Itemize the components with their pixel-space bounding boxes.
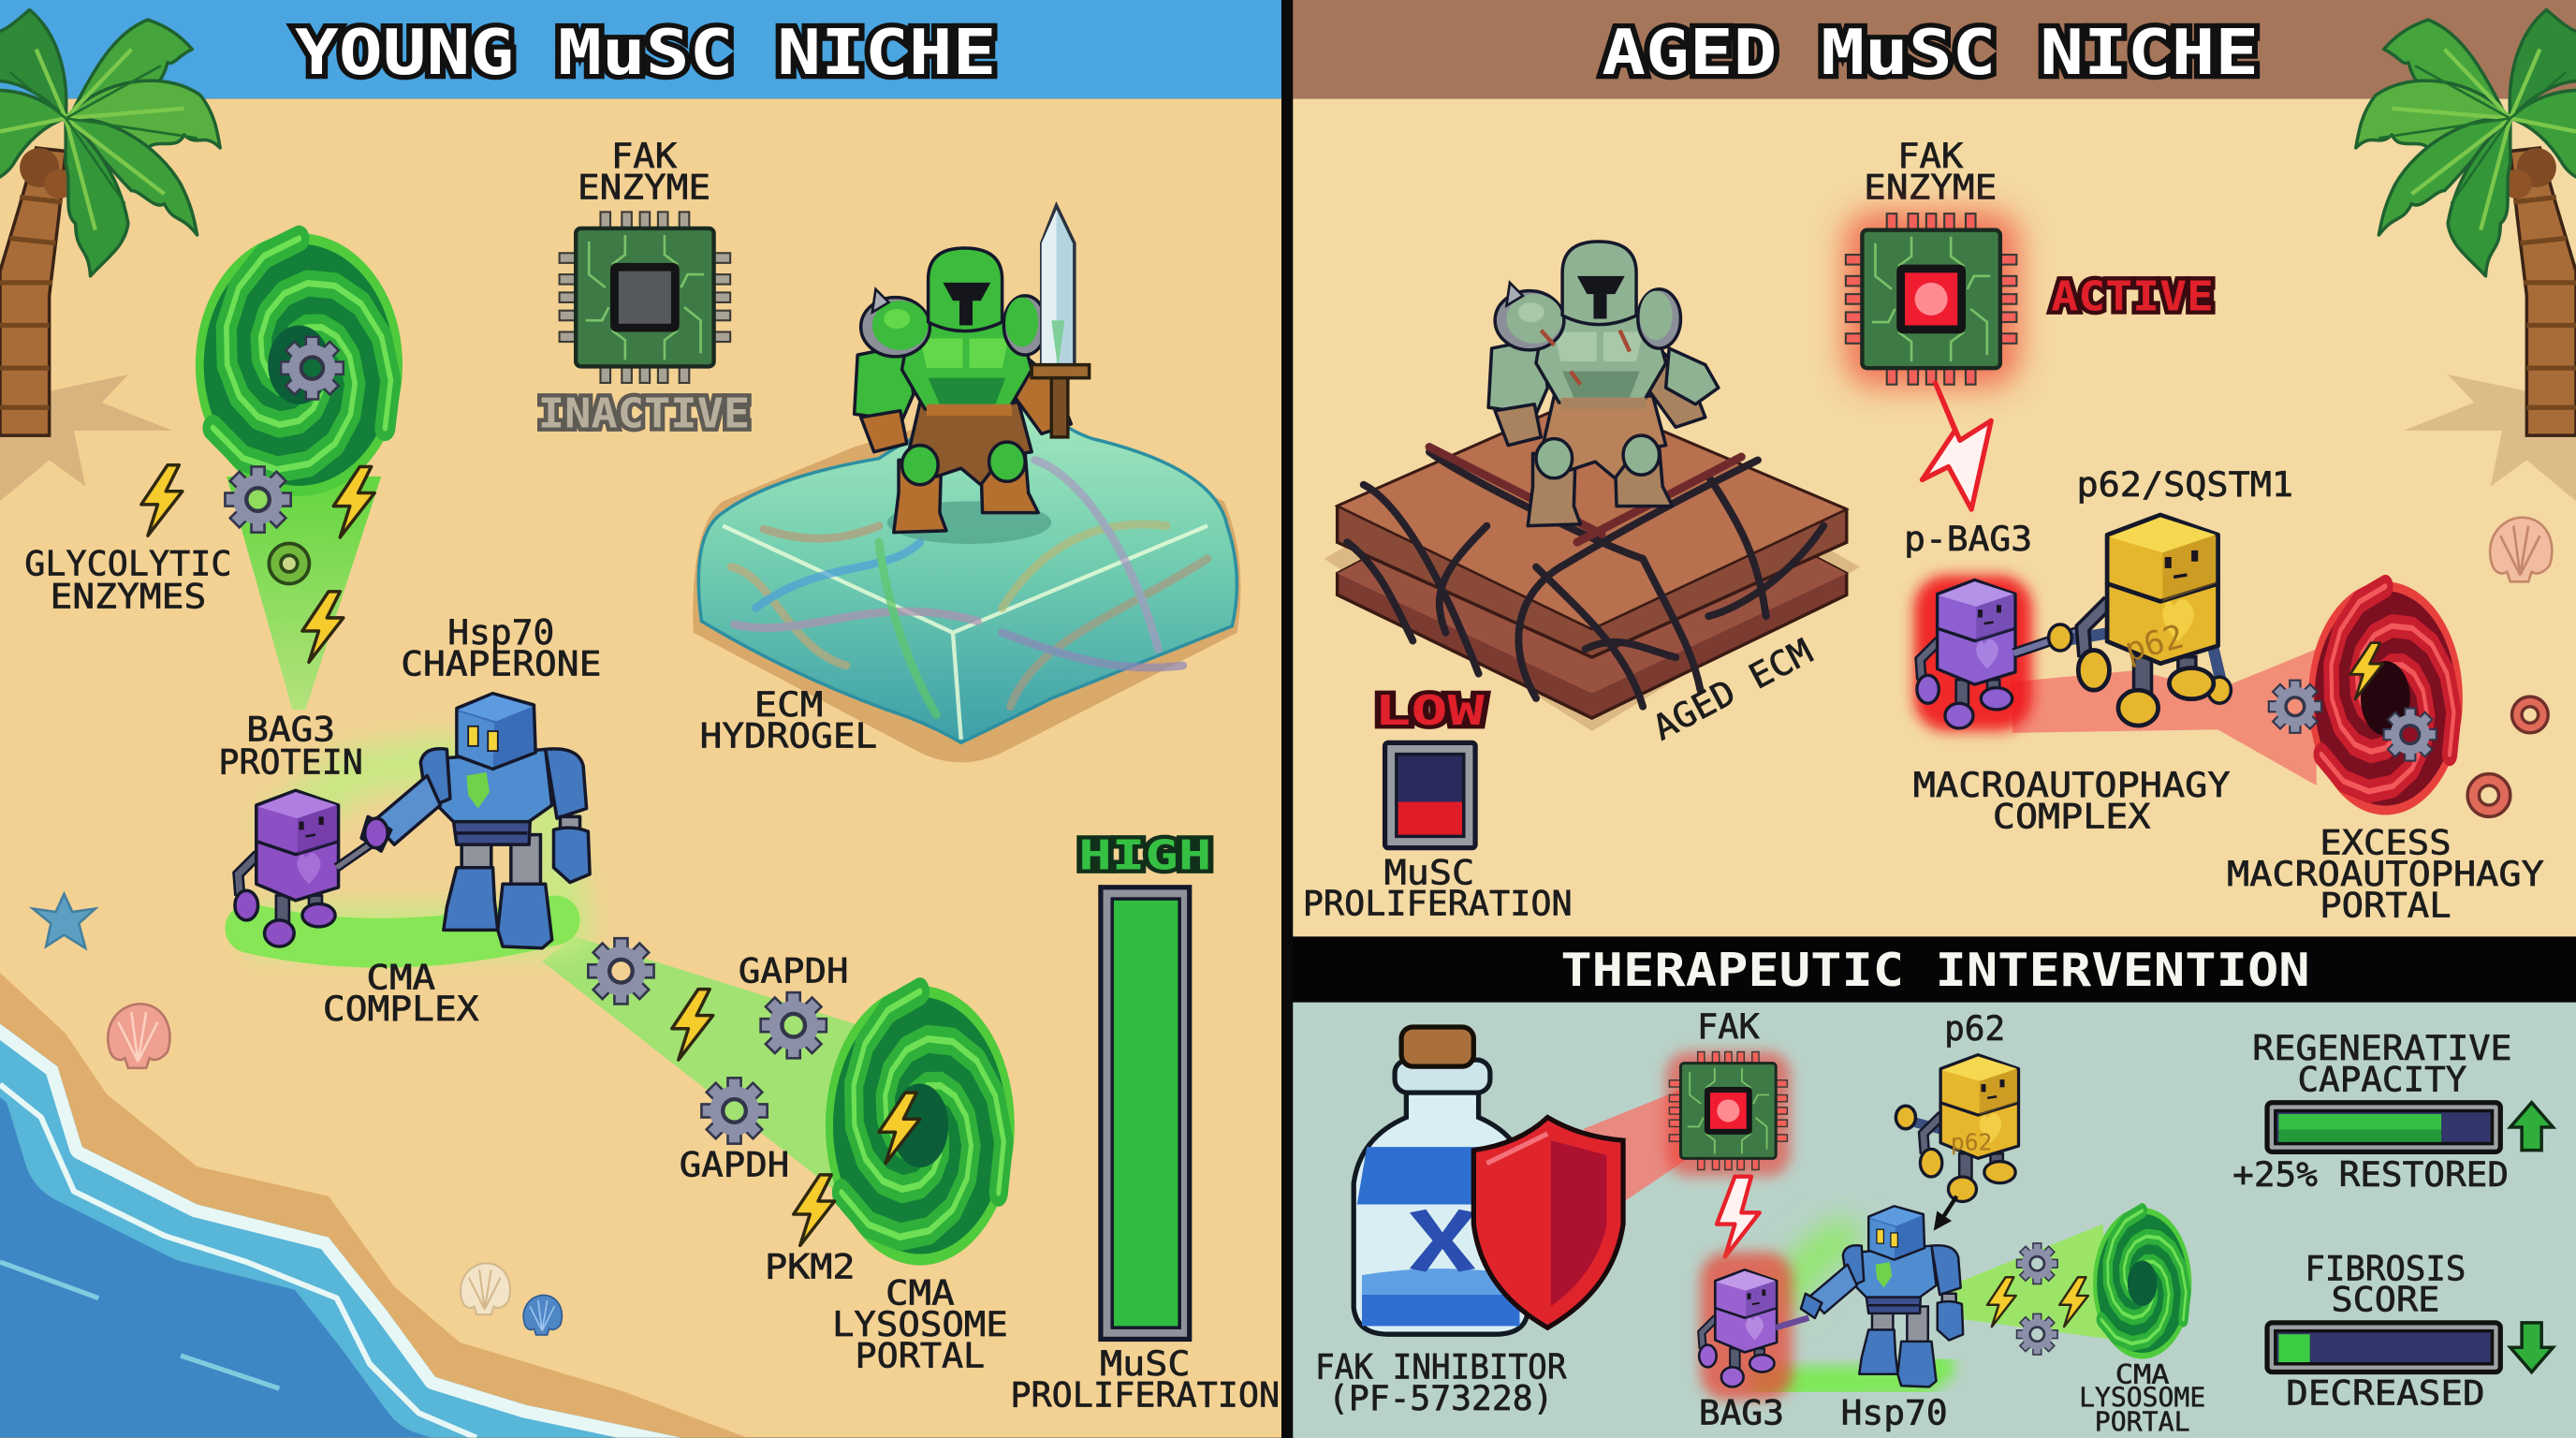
palm shadow — [0, 374, 172, 501]
lightning: blocked — [1717, 1177, 1760, 1257]
label: Hsp70: CHAPERONE — [401, 643, 601, 683]
gear — [2017, 1313, 2057, 1355]
green upper glow — [1782, 1232, 1856, 1306]
label: FAK enzyme: ENZYME — [578, 167, 710, 207]
bolt — [333, 466, 374, 537]
label: GAPDH — [680, 1145, 789, 1185]
label: restored: +25% RESTORED — [2232, 1154, 2509, 1195]
label: MuSC proliferation: PROLIFERATION — [1010, 1374, 1280, 1415]
gauge: fibrosis — [2267, 1323, 2500, 1372]
glycolytic portal — [196, 233, 421, 507]
chip glow — [1666, 1051, 1791, 1177]
gear GAPDH — [761, 992, 827, 1058]
glycolysis tail beam — [227, 477, 381, 710]
icon: FAK chip — [1669, 1052, 1787, 1169]
red glow behind p-BAG3 — [1914, 575, 2032, 731]
aged ECM slabs — [1338, 398, 1847, 718]
starfish — [33, 894, 95, 948]
label: fibrosis score: FIBROSIS — [2305, 1248, 2466, 1288]
panel: aged MuSC niche — [1293, 0, 2576, 936]
palm tree — [2356, 10, 2576, 435]
bolt PKM2 — [794, 1175, 835, 1245]
red glow purple — [1701, 1252, 1793, 1400]
label: FAK enzyme — [1864, 136, 1997, 207]
panel: young MuSC niche — [0, 0, 1281, 1438]
FAK inhibitor bottle — [1354, 1027, 1528, 1334]
label: FAK enzyme: FAK — [1897, 136, 1964, 176]
red gear debris — [2467, 774, 2510, 816]
bolt — [302, 592, 344, 662]
stream to small portal — [1952, 1225, 2111, 1339]
label: FAK enzyme: ENZYME — [1864, 167, 1997, 207]
label: MuSC proliferation: MuSC — [1384, 852, 1474, 892]
status: inactive: INACTIVE — [538, 389, 750, 437]
label: CMA complex — [323, 958, 479, 1029]
label: BAG3 — [218, 710, 363, 783]
CMA lysosome portal — [826, 986, 1032, 1278]
proliferation bar: low — [1385, 742, 1475, 848]
shell blue — [523, 1295, 562, 1335]
label: macroautophagy complex: MACROAUTOPHAGY — [1913, 765, 2231, 805]
active chip glow — [1843, 211, 2021, 388]
gear — [2269, 681, 2321, 733]
label: fibrosis score — [2305, 1248, 2466, 1320]
red beam shield to FAK — [1584, 1088, 1690, 1201]
lightning: phosphorylation — [1922, 383, 1991, 509]
label: p62/SQSTM1: p62/SQSTM1 — [2076, 464, 2293, 505]
red gear debris — [2512, 697, 2548, 733]
label: ENZYMES — [51, 576, 206, 616]
label: Hsp70 — [401, 612, 601, 683]
label: ECM hydrogel: HYDROGEL — [700, 716, 877, 756]
heading: young: YOUNG MuSC NICHE — [295, 16, 996, 89]
label: GAPDH — [739, 951, 849, 991]
sand background — [1293, 98, 2576, 936]
red stream — [2011, 649, 2317, 785]
label: MuSC proliferation: PROLIFERATION — [1303, 884, 1573, 924]
label: macroautophagy complex — [1913, 765, 2231, 837]
bolt — [1987, 1277, 2016, 1327]
protein: p62 robot — [2049, 515, 2231, 726]
macroautophagy portal — [2308, 581, 2477, 826]
arrow down — [2510, 1323, 2553, 1372]
bolt — [672, 990, 713, 1060]
protein: p62 robot: p62 — [2121, 617, 2188, 669]
gear — [225, 466, 291, 533]
protein: p62 free: p62 — [1951, 1129, 1992, 1156]
header bar: therapy — [1293, 936, 2576, 1003]
icon: active chip — [1846, 213, 2016, 385]
bolt — [2059, 1277, 2088, 1327]
ECM hydrogel — [698, 401, 1237, 742]
label: ECM hydrogel — [700, 684, 877, 756]
label: MuSC proliferation — [1303, 852, 1573, 924]
label: CMA lysosome portal: LYSOSOME — [832, 1304, 1008, 1344]
label: FAK: FAK — [1697, 1006, 1761, 1047]
knight: aged, faded — [1488, 242, 1719, 526]
palm shadow — [2404, 374, 2576, 501]
heading: therapy: THERAPEUTIC INTERVENTION — [1560, 943, 2310, 997]
label: PKM2 — [765, 1247, 856, 1287]
surf foam — [0, 1023, 681, 1438]
label: p62: p62 — [1944, 1008, 2005, 1049]
label: BAG3: BAG3 — [246, 710, 335, 750]
bolt in portal — [879, 1093, 920, 1164]
protein: p-BAG3 robot — [1917, 580, 2087, 728]
label: small portal: PORTAL — [2095, 1407, 2190, 1438]
beach sand background — [0, 98, 1281, 1438]
gauge: regenerative capacity — [2267, 1103, 2500, 1152]
label: small portal — [2079, 1359, 2205, 1438]
aged ECM shadow — [1325, 411, 1860, 731]
background — [1293, 1003, 2576, 1438]
shell — [2490, 518, 2552, 581]
ocean — [0, 1024, 681, 1438]
protein: p62 free — [1895, 1055, 2018, 1201]
stream to lysosome portal — [542, 936, 855, 1208]
gear in portal — [2384, 708, 2437, 761]
shadow under knight — [887, 501, 1051, 544]
shell white — [461, 1263, 510, 1314]
label: CMA complex: CMA — [366, 958, 435, 998]
label: CMA complex: COMPLEX — [323, 989, 479, 1029]
label: small portal: CMA — [2115, 1359, 2170, 1390]
label: Hsp70: Hsp70 — [1841, 1393, 1948, 1433]
label: aged ECM: AGED ECM — [1647, 631, 1819, 748]
label: FAK enzyme: FAK — [611, 136, 678, 176]
knight: healthy green — [855, 205, 1090, 533]
label: MuSC proliferation — [1010, 1343, 1280, 1415]
palm tree — [0, 10, 220, 435]
label: excess macroautophagy portal: MACROAUTOPHAGY — [2227, 854, 2544, 894]
small green enzyme gear — [269, 544, 309, 583]
label: Hsp70: Hsp70 — [447, 612, 554, 653]
sword — [1032, 205, 1090, 437]
gear — [588, 938, 654, 1004]
hydrogel base shadow — [693, 401, 1241, 762]
bolt in portal — [2349, 643, 2383, 699]
protein: BAG3 robot — [235, 790, 388, 946]
label: FAK inhibitor: FAK INHIBITOR — [1315, 1347, 1567, 1387]
status: active: ACTIVE — [2051, 273, 2214, 321]
label: CMA lysosome portal — [832, 1273, 1008, 1375]
center divider — [1281, 0, 1293, 1438]
label: excess macroautophagy portal: PORTAL — [2320, 885, 2452, 925]
label: ECM hydrogel: ECM — [754, 684, 823, 725]
label: p-BAG3: p-BAG3 — [1904, 519, 2032, 559]
CMA complex glow — [246, 759, 567, 943]
proliferation bar: high — [1101, 888, 1190, 1339]
green base glow — [1766, 1367, 1939, 1384]
label: regenerative capacity — [2252, 1028, 2512, 1099]
label: fibrosis score: SCORE — [2331, 1280, 2439, 1320]
small CMA portal — [2093, 1208, 2201, 1366]
protein: BAG3 — [1699, 1269, 1808, 1387]
gear — [2017, 1243, 2057, 1284]
panel: therapeutic intervention — [1293, 936, 2576, 1438]
gear GAPDH — [701, 1078, 768, 1144]
red shield — [1473, 1118, 1623, 1328]
label: excess macroautophagy portal: EXCESS — [2320, 823, 2452, 863]
shell pink — [108, 1004, 169, 1068]
label: regenerative capacity: REGENERATIVE — [2252, 1028, 2512, 1068]
header bar: young — [0, 0, 1281, 98]
protein: Hsp70 — [1801, 1206, 1963, 1387]
bolt — [141, 465, 183, 536]
label: FAK inhibitor: (PF-573228) — [1328, 1378, 1553, 1418]
status: low: LOW — [1374, 687, 1486, 735]
heading: aged: AGED MuSC NICHE — [1602, 16, 2259, 89]
label: FAK inhibitor — [1315, 1347, 1567, 1418]
status: high: HIGH — [1078, 831, 1211, 879]
label: decreased: DECREASED — [2286, 1373, 2485, 1414]
label: BAG3: BAG3 — [1699, 1393, 1784, 1433]
label: small portal: LYSOSOME — [2079, 1382, 2205, 1413]
wet sand shoreline — [0, 973, 748, 1438]
header bar: aged — [1293, 0, 2576, 98]
label: macroautophagy complex: COMPLEX — [1993, 797, 2150, 837]
label: CMA lysosome portal: PORTAL — [856, 1335, 985, 1375]
label: excess macroautophagy portal — [2227, 823, 2544, 925]
label: BAG3: PROTEIN — [218, 742, 363, 783]
label: regenerative capacity: CAPACITY — [2298, 1059, 2466, 1099]
icon: inactive chip — [560, 212, 730, 383]
protein: Hsp70 chaperone robot — [361, 694, 590, 948]
gear inside portal — [281, 337, 344, 400]
vines — [1347, 447, 1823, 707]
label: MuSC proliferation: MuSC — [1100, 1343, 1191, 1384]
label: CMA lysosome portal: CMA — [886, 1273, 955, 1313]
label — [24, 543, 231, 616]
label: FAK enzyme — [578, 136, 710, 207]
arrow: p62 to Hsp70 — [1934, 1196, 1956, 1231]
arrow up — [2510, 1103, 2553, 1151]
label: GLYCOLYTIC — [24, 543, 231, 583]
